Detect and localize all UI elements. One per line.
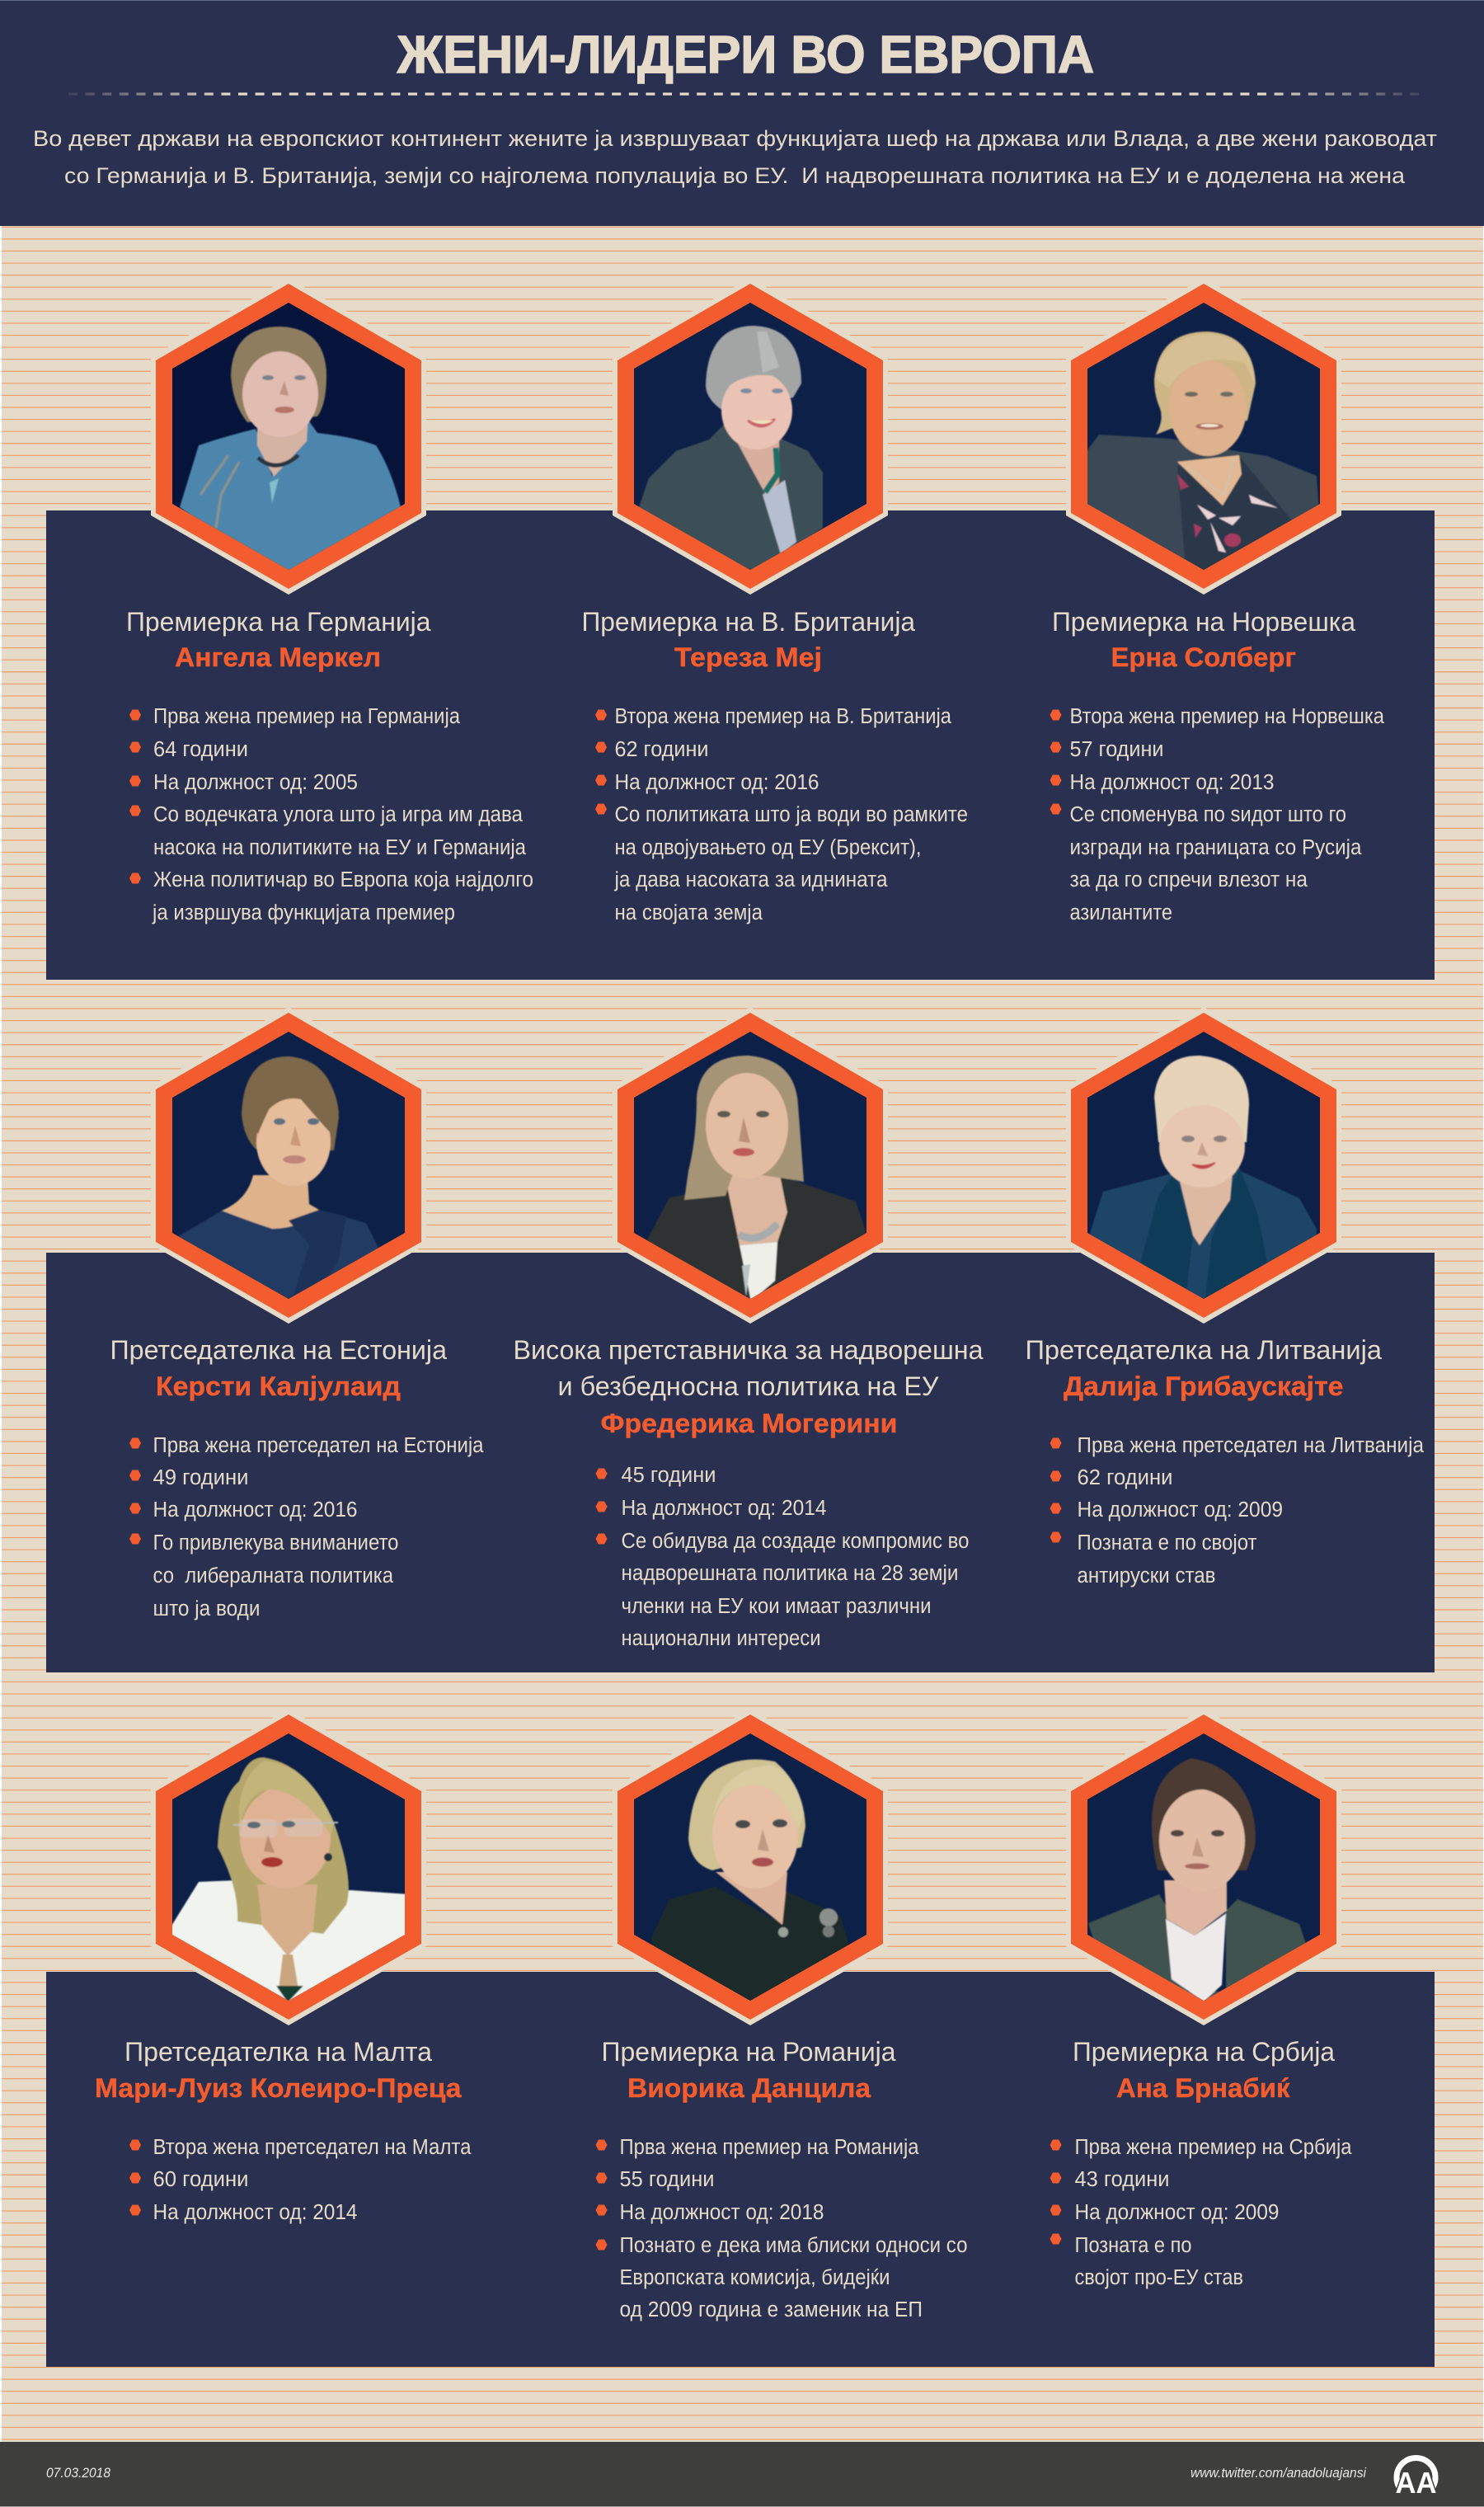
leader text: Estonia: 49 години (153, 1466, 249, 1489)
portrait: Federica Mogherini (613, 1007, 888, 1324)
leader text: Norway (1050, 607, 1385, 924)
leader text: Estonia: Го привлекува вниманието (153, 1531, 399, 1555)
leader text: Norway: Премиерка на Норвешка (1052, 607, 1355, 637)
icon: Anadolu Agency logo: AA (1395, 2466, 1436, 2500)
leader text: Malta: На должност од: 2014 (153, 2201, 358, 2224)
leader text: United Kingdom: Со политиката што ја води во рамките (615, 803, 968, 826)
leader text: Lithuania: Претседателка на Литванија (1026, 1335, 1382, 1365)
leader text: Malta: Мари-Луиз Колеиро-Преца (95, 2073, 462, 2103)
leader text: Germany: На должност од: 2005 (153, 771, 358, 794)
leader text: Romania: Познато е дека има блиски односи со (620, 2234, 968, 2257)
leader text: Norway: Ерна Солберг (1111, 642, 1296, 672)
portrait: Kersti Kaljulaid (151, 1007, 426, 1324)
leader text: European Union: Висока претставничка за надворешна (513, 1335, 984, 1365)
leader text: United Kingdom: на својата земја (615, 901, 763, 924)
intro text: со Германија и В. Британија, земји со најголема популација во ЕУ. И надворешната политика на ЕУ и е доделена на жена (64, 163, 1406, 188)
leader text: Romania: 55 години (620, 2168, 714, 2191)
leader text: European Union: надворешната политика на 28 земји (622, 1562, 958, 1585)
leader text: Serbia: Позната е по (1075, 2234, 1192, 2257)
leader text: Estonia: На должност од: 2016 (153, 1498, 358, 1522)
leader text: Malta: Втора жена претседател на Малта (153, 2136, 472, 2159)
leader text: Romania: На должност од: 2018 (620, 2201, 824, 2224)
leader text: United Kingdom: 62 години (615, 738, 709, 761)
panel: row 2 (46, 1253, 1435, 1672)
leader text: Lithuania: На должност од: 2009 (1077, 1498, 1283, 1522)
leader text: Germany: Прва жена премиер на Германија (153, 705, 461, 728)
leader text: Estonia: Претседателка на Естонија (110, 1335, 447, 1365)
leader text: Lithuania: 62 години (1077, 1466, 1172, 1489)
leader text: European Union: национални интереси (622, 1627, 821, 1650)
leader text: Serbia: На должност од: 2009 (1075, 2201, 1280, 2224)
leader text: Norway: Се споменува по ѕидот што го (1070, 803, 1346, 826)
leader text: Germany: насока на политиките на ЕУ и Германија (153, 836, 527, 859)
leader text: European Union: На должност од: 2014 (622, 1497, 826, 1520)
leader text: Lithuania: антируски став (1077, 1564, 1215, 1587)
leader text: Romania: Прва жена премиер на Романија (620, 2136, 919, 2159)
panel: row 1 (46, 510, 1435, 980)
intro text: Во девет држави на европскиот континент жените ја извршуваат функцијата шеф на држава или Влада, а две жени раководат (33, 126, 1437, 151)
leader text: European Union: членки на ЕУ кои имаат различни (622, 1595, 932, 1618)
leader text: Norway: На должност од: 2013 (1070, 771, 1275, 794)
leader text: Estonia: што ја води (153, 1597, 261, 1620)
leader text: Estonia: Керсти Калјулаид (156, 1371, 401, 1401)
leader text: Germany: ја извршува функцијата премиер (152, 901, 455, 924)
portrait: Viorica Dancila (613, 1709, 888, 2025)
leader text: Lithuania: Далија Грибаускајте (1064, 1371, 1344, 1401)
header text (33, 25, 1437, 188)
portrait: Erna Solberg (1066, 278, 1341, 595)
leader text: Norway: за да го спречи влезот на (1070, 868, 1308, 891)
footer (0, 2442, 1484, 2507)
leader text: Estonia (110, 1335, 484, 1620)
portrait: Theresa May (613, 278, 888, 595)
leader text: United Kingdom: ја дава насоката за иднината (614, 868, 888, 891)
leader text: Serbia (1050, 2037, 1352, 2289)
portrait: Dalia Grybauskaite (1066, 1007, 1341, 1324)
leader text: Malta: Претседателка на Малта (124, 2037, 432, 2067)
leader text: Germany: Жена политичар во Европа која најдолго (153, 868, 533, 891)
leader text: European Union: 45 години (622, 1464, 716, 1487)
leader text: Norway: изгради на границата со Русија (1070, 836, 1362, 859)
leader text: Lithuania: Позната е по својот (1077, 1531, 1257, 1555)
leader text: Germany: Со водечката улога што ја игра им дава (153, 803, 524, 826)
leader text: European Union: Фредерика Могерини (600, 1409, 897, 1438)
leader text: Malta (95, 2037, 472, 2224)
leader text: Serbia: Ана Брнабиќ (1116, 2073, 1291, 2103)
leader text: Estonia: Прва жена претседател на Естонија (153, 1434, 484, 1457)
leader text: Estonia: со либералната политика (153, 1564, 394, 1587)
portrait: Angela Merkel (151, 278, 426, 595)
leader text: Serbia: Прва жена премиер на Србија (1075, 2136, 1352, 2159)
leader text: Romania: Европската комисија, бидејќи (620, 2266, 890, 2289)
portrait: Marie-Louise Coleiro Preca (151, 1709, 426, 2025)
date: 07.03.2018 (46, 2465, 110, 2481)
leader text: Serbia: 43 години (1075, 2168, 1169, 2191)
title: ЖЕНИ-ЛИДЕРИ ВО ЕВРОПА (397, 25, 1094, 84)
leader text: United Kingdom: на одвојувањето од ЕУ (Брексит), (615, 836, 922, 859)
leader text: Romania: Виорика Данцила (627, 2073, 871, 2103)
leader text: United Kingdom: Тереза Меј (674, 642, 822, 672)
leader text: Germany: 64 години (153, 738, 248, 761)
leader text: Serbia: Премиерка на Србија (1073, 2037, 1335, 2067)
leader text: United Kingdom (582, 607, 968, 924)
leader text: European Union: Се обидува да создаде компромис во (622, 1530, 970, 1553)
panel: row 3 (46, 1972, 1435, 2367)
leader text: Lithuania: Прва жена претседател на Литванија (1077, 1434, 1425, 1457)
leader text: Norway: Втора жена премиер на Норвешка (1070, 705, 1385, 728)
leader text: Germany: Ангела Меркел (175, 642, 381, 672)
leader text: Germany (126, 607, 533, 924)
header background (0, 0, 1484, 226)
portrait: Ana Brnabic (1066, 1709, 1341, 2025)
leader text: Lithuania (1026, 1335, 1425, 1587)
leader text: Romania: Премиерка на Романија (602, 2037, 896, 2067)
leader text: European Union: и безбедносна политика на ЕУ (557, 1371, 939, 1401)
leader text: Germany: Премиерка на Германија (126, 607, 431, 637)
leader text: European Union (513, 1335, 984, 1650)
leader text: Norway: азилантите (1070, 901, 1172, 924)
leader text: Malta: 60 години (153, 2168, 249, 2191)
intro text (33, 126, 1437, 188)
leader text: United Kingdom: На должност од: 2016 (615, 771, 819, 794)
leader text: Romania: од 2009 година е заменик на ЕП (620, 2298, 923, 2321)
leader text: Serbia: својот про-ЕУ став (1075, 2266, 1243, 2289)
leader text: United Kingdom: Премиерка на В. Британија (582, 607, 915, 637)
source link: www.twitter.com/anadoluajansi (1190, 2465, 1367, 2481)
leader text: Norway: 57 години (1070, 738, 1164, 761)
leader text: United Kingdom: Втора жена премиер на В. Британија (615, 705, 952, 728)
leader text: Romania (595, 2037, 968, 2321)
